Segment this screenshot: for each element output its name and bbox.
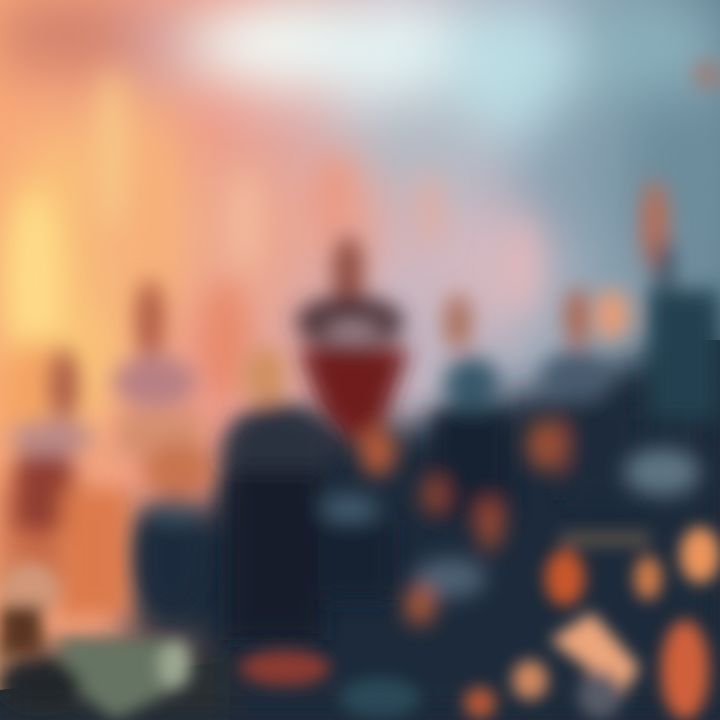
tower: right (526, 288, 640, 500)
tower: far right (595, 63, 720, 496)
tower: lower centre-left (223, 347, 393, 640)
lower dark mass (0, 340, 720, 720)
tower: centre red (296, 236, 410, 476)
flame streaks (0, 70, 534, 440)
tower: centre-right teal (405, 294, 510, 625)
base shadow (0, 340, 720, 720)
tower: left (113, 280, 214, 613)
tower: far left (10, 349, 128, 615)
rubble foreground (0, 527, 720, 720)
